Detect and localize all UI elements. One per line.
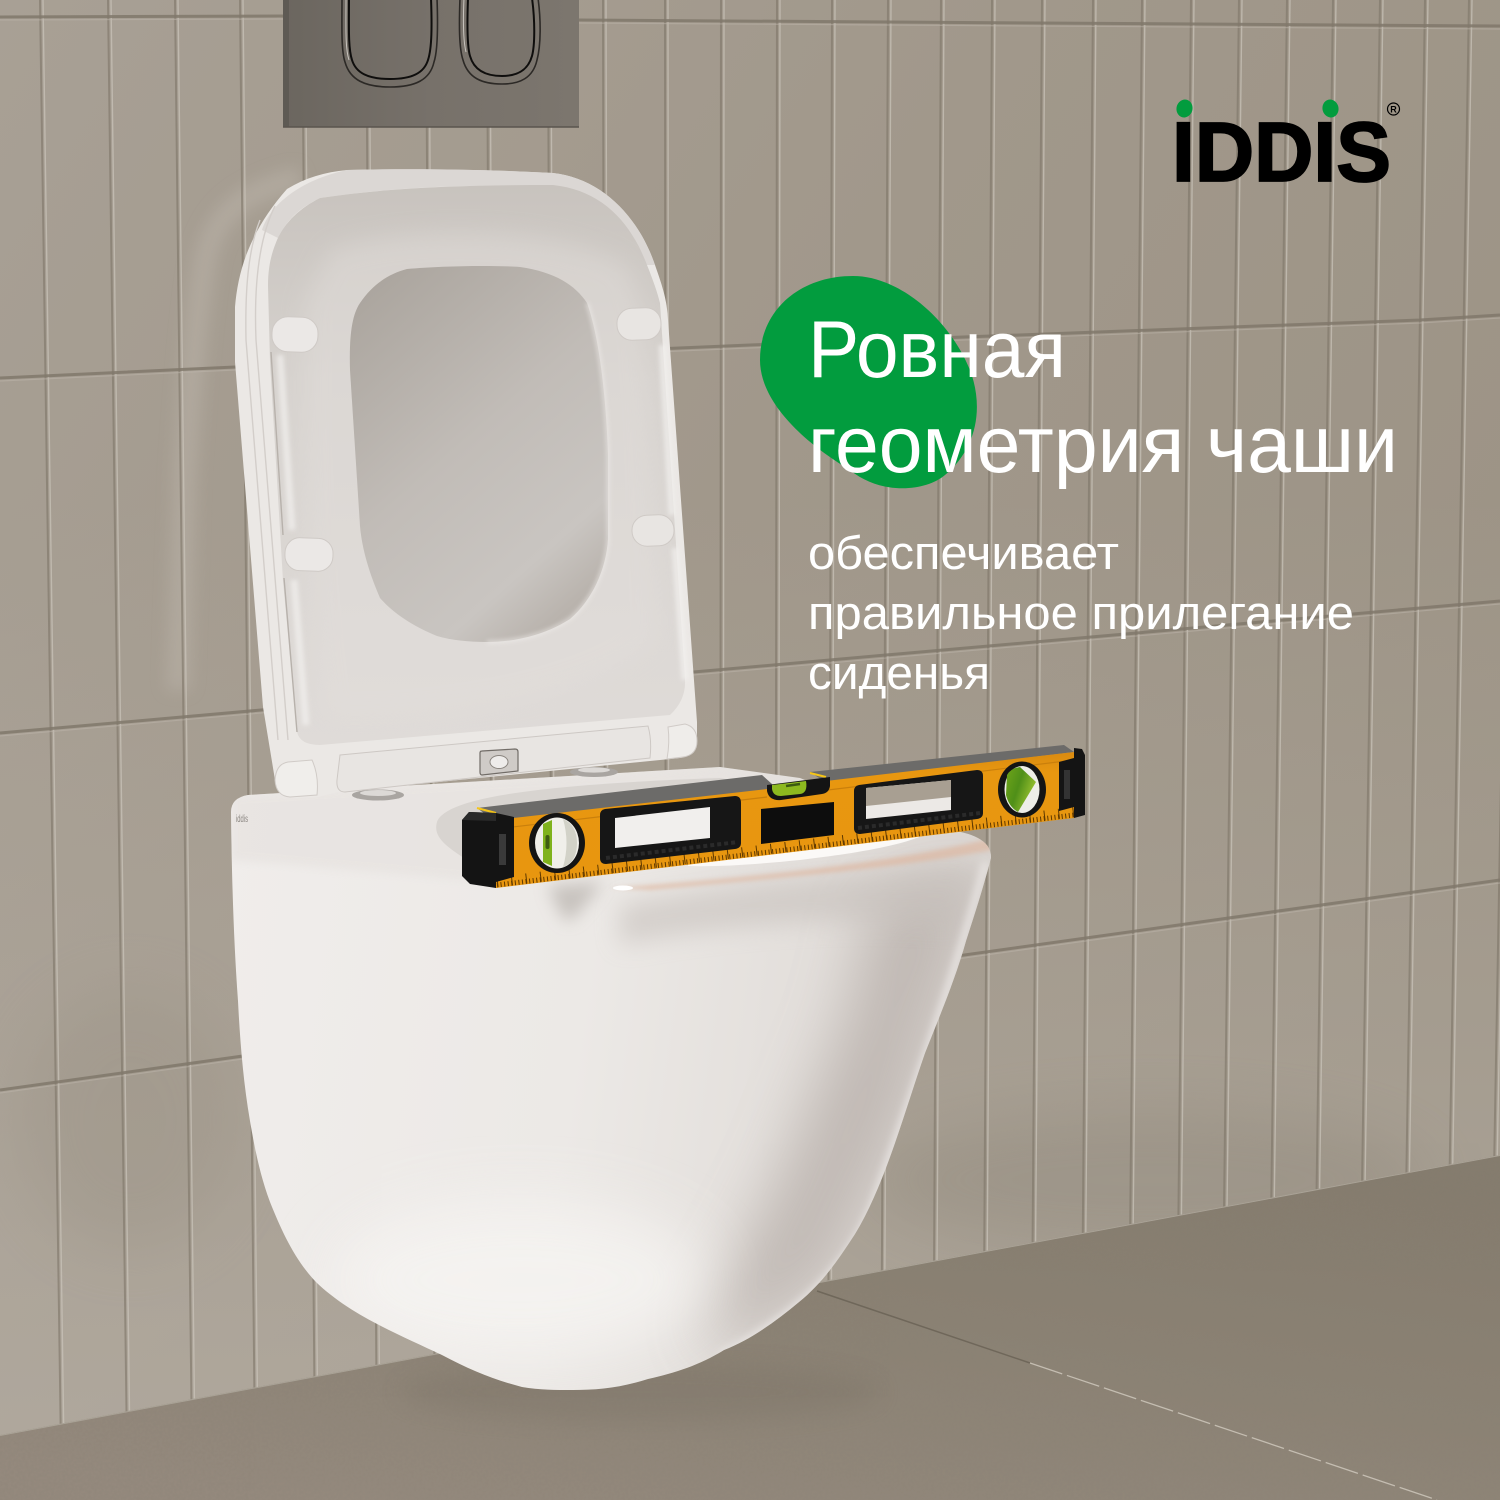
heading — [808, 305, 1398, 490]
center black label — [761, 802, 834, 844]
logo dot left — [1174, 98, 1195, 119]
bowl inner white sliver — [688, 836, 920, 866]
right end cap — [1059, 748, 1085, 818]
floor — [0, 1150, 1500, 1500]
level top surface — [477, 775, 772, 822]
hinge feet — [352, 767, 618, 800]
seat ring light — [303, 233, 660, 721]
icon: small flush button — [459, 0, 540, 84]
registered mark — [1388, 103, 1400, 115]
logo dot right — [1320, 98, 1341, 119]
seat side strips — [280, 345, 685, 725]
spirit level — [462, 745, 1085, 888]
bowl deck top — [234, 770, 666, 860]
heading: Ровная — [808, 305, 1066, 395]
left vial — [529, 813, 585, 873]
yellow corners — [477, 773, 826, 813]
logo: IDDIS — [1172, 105, 1391, 199]
top bubble vial — [767, 777, 830, 800]
icon: large flush button — [342, 0, 438, 87]
bumper bottom left — [284, 537, 334, 572]
bowl rim band — [616, 872, 914, 946]
chrome latch — [480, 749, 518, 775]
seat top rim tone — [262, 169, 655, 265]
level reflection on glaze — [610, 838, 992, 890]
seat opening — [350, 266, 608, 642]
registered mark: R — [1390, 104, 1397, 114]
toilet seat — [235, 169, 697, 798]
bowl right shading — [700, 870, 985, 1350]
right handle — [854, 770, 983, 834]
heading: геометрия чаши — [808, 400, 1398, 490]
bowl glaze highlight — [613, 886, 633, 890]
seat outer rim — [235, 169, 697, 798]
left handle — [600, 796, 741, 864]
left end cap — [462, 812, 514, 888]
toilet bowl — [231, 767, 992, 1390]
seat recess — [268, 185, 685, 745]
flush plate — [283, 0, 579, 127]
ruler ticks — [497, 812, 1074, 885]
seat left ridges — [246, 206, 288, 740]
hinge knob right — [667, 724, 697, 759]
subheading text: правильное прилегание — [808, 586, 1354, 639]
hinge knob left — [275, 760, 317, 797]
subheading text: сиденья — [808, 646, 990, 699]
bowl opening — [436, 778, 725, 856]
bumper top right — [616, 307, 662, 341]
seat hinge bar — [337, 726, 651, 792]
subheading text — [808, 526, 1354, 699]
bowl fold shadow — [548, 882, 603, 922]
right vial — [998, 762, 1046, 818]
subheading text: обеспечивает — [808, 526, 1119, 579]
seat side channels — [271, 352, 297, 732]
bowl lower glow — [330, 1200, 710, 1360]
level body — [496, 752, 1074, 888]
bowl right edge highlight — [720, 862, 986, 1355]
small bowl logo: iddis — [236, 814, 248, 825]
bumper bottom right — [631, 514, 675, 547]
seat opening highlight — [487, 303, 608, 642]
green blob — [760, 276, 977, 488]
bumper top left — [271, 316, 319, 353]
